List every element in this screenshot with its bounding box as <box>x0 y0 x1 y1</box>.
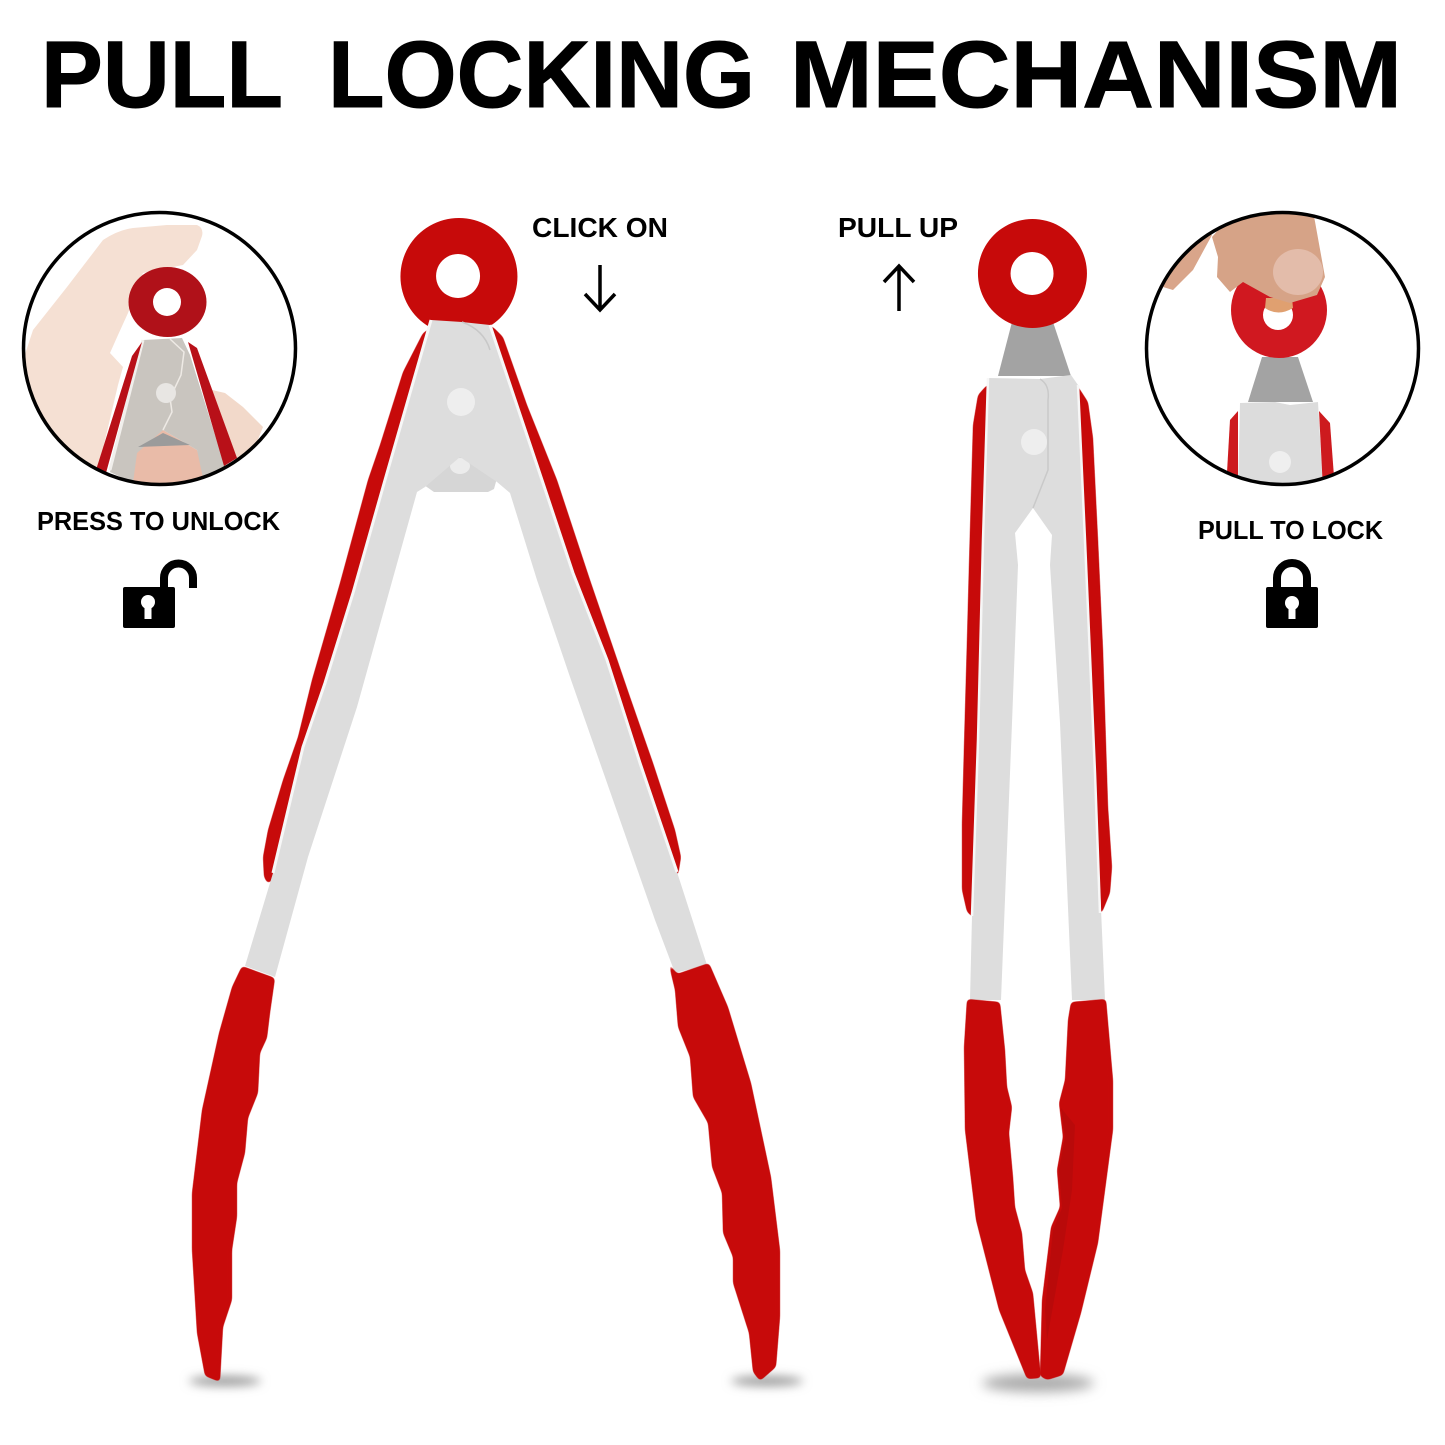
label: click on: CLICK ON <box>532 212 668 243</box>
inset photo: fingers pulling the ring <box>1163 214 1334 483</box>
title: LOCKING <box>328 22 755 128</box>
shadow: right tip <box>731 1376 803 1386</box>
inset photo: thumb pressing the ring <box>26 225 263 483</box>
left grip <box>192 966 275 1382</box>
right grip <box>1040 999 1113 1380</box>
title: MECHANISM <box>790 22 1402 128</box>
ring <box>400 218 517 335</box>
neck <box>998 322 1071 376</box>
steel A frame <box>245 320 707 977</box>
open tongs <box>189 218 803 1386</box>
panel: pull to lock <box>1145 205 1420 628</box>
label: press to unlock: PRESS TO UNLOCK <box>37 508 281 536</box>
rivet <box>1021 429 1047 455</box>
right silicone strip <box>1070 385 1112 915</box>
hinge seam <box>1033 379 1048 508</box>
grip inner shading <box>1045 1108 1075 1340</box>
inset circle outline <box>24 212 296 484</box>
inset photo: ring <box>128 267 206 337</box>
icon: open padlock <box>123 564 193 628</box>
ring <box>978 219 1087 328</box>
arrow: down <box>585 265 615 310</box>
shadow: left tip <box>189 1376 261 1386</box>
closed tongs <box>962 219 1113 1392</box>
shadow: tips <box>982 1374 1094 1392</box>
label: pull to lock: PULL TO LOCK <box>1198 517 1384 545</box>
arrow: up <box>884 266 914 311</box>
label: pull up: PULL UP <box>838 212 958 243</box>
inset circle outline <box>1146 212 1418 484</box>
left grip <box>964 999 1041 1379</box>
rivet behind notch <box>450 458 470 474</box>
icon: closed padlock <box>1266 563 1318 628</box>
panel: press to unlock <box>10 211 297 628</box>
steel highlights <box>273 320 677 873</box>
title <box>41 22 1402 128</box>
left silicone strip <box>962 385 995 918</box>
rivet <box>447 388 475 416</box>
title: PULL <box>41 22 283 128</box>
right grip <box>668 961 780 1381</box>
right silicone strip <box>486 325 681 876</box>
hinge seam <box>462 322 490 350</box>
steel highlights <box>972 378 1100 916</box>
steel frame <box>970 375 1105 1000</box>
back plate <box>424 455 497 492</box>
left silicone strip <box>263 325 435 884</box>
